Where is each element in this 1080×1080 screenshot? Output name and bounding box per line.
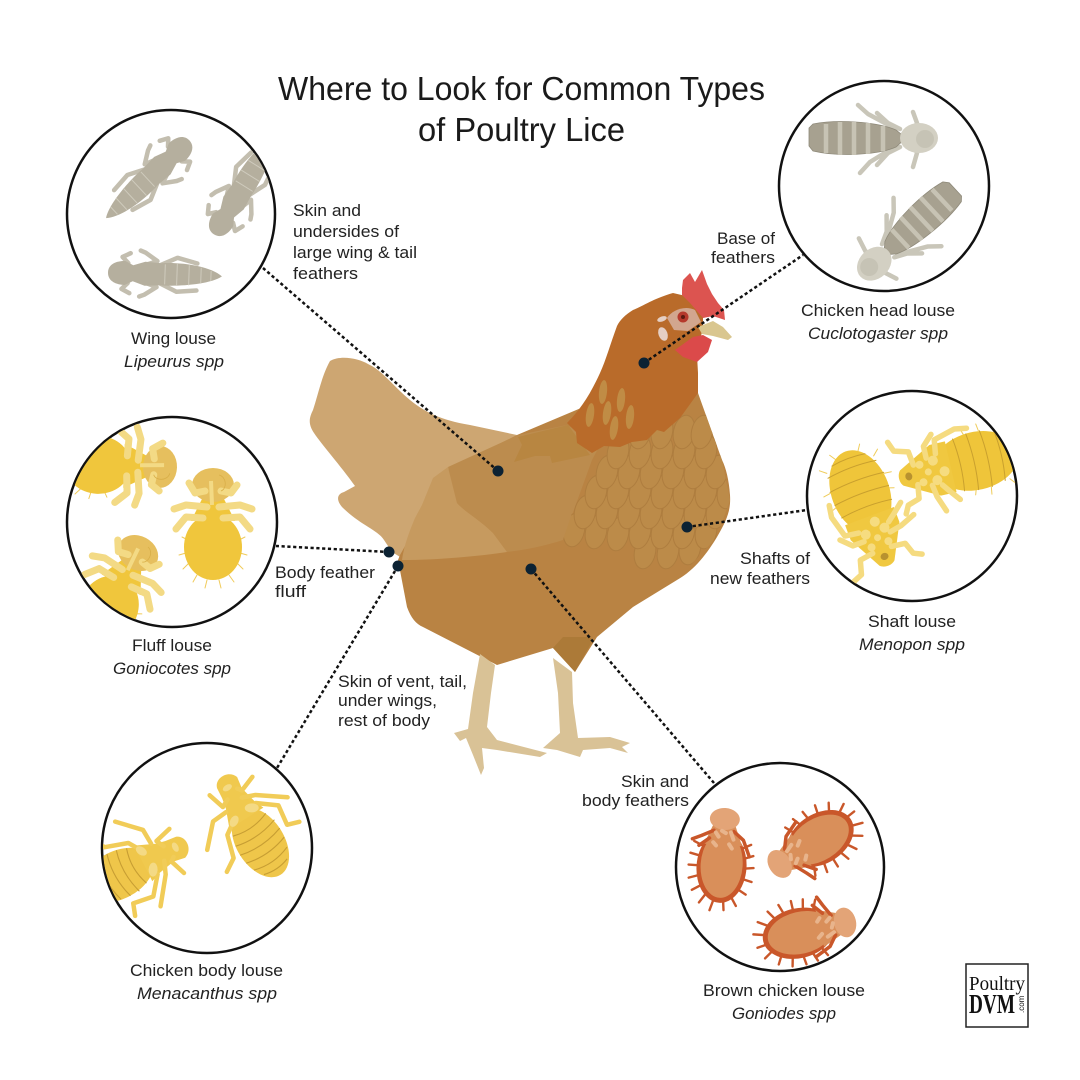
label: wing louse: Wing louse [131,330,216,348]
location text: base of feathers: Base of [717,230,775,248]
location text: skin of vent: Skin of vent, tail, [338,673,467,691]
label: chicken body louse: Menacanthus spp [137,985,277,1003]
location dots [384,358,692,574]
hen beak [698,321,732,340]
location text: skin of vent: rest of body [338,712,431,730]
label: chicken head louse: Cuclotogaster spp [808,325,948,343]
title: of Poultry Lice [418,111,625,148]
title: Where to Look for Common Types [278,70,765,107]
location text: skin and body feathers: body feathers [582,792,689,810]
panel: shaft louse [807,391,1029,601]
leader lines [263,255,807,783]
label: shaft louse: Menopon spp [859,636,965,654]
location text: base of feathers: feathers [711,249,775,267]
label: chicken body louse: Chicken body louse [130,962,283,980]
logo: PoultryDVM [966,964,1028,1027]
panel: chicken body louse [100,742,314,954]
logo: PoultryDVM: .com [1017,995,1026,1013]
logo: PoultryDVM: DVM [969,989,1015,1019]
location text: wing feathers: undersides of [293,223,399,241]
hen illustration [310,270,742,775]
label: brown chicken louse: Brown chicken louse [703,982,865,1000]
panel: wing louse [67,110,294,318]
location text: shafts of new feathers [710,550,810,588]
hen wing lower [402,467,507,560]
location text: wing feathers: feathers [293,265,358,283]
label: fluff louse: Goniocotes spp [113,660,231,678]
label: fluff louse [113,637,231,678]
location text: skin and body feathers: Skin and [621,773,689,791]
label: fluff louse: Fluff louse [132,637,212,655]
hen neck [567,293,703,453]
location text: wing feathers [293,202,417,283]
label: shaft louse: Shaft louse [868,613,956,631]
hen wing [448,425,600,552]
hen left leg [454,654,547,775]
panel: fluff louse [66,416,278,628]
label: brown chicken louse: Goniodes spp [732,1005,836,1023]
hen wattle [675,335,712,362]
location text: base of feathers [711,230,775,267]
label: chicken head louse [801,302,955,343]
logo: PoultryDVM: Poultry [969,973,1025,995]
hen wing shade [514,425,590,463]
hen face [656,308,701,342]
location text: skin of vent: under wings, [338,692,437,710]
location text: shafts of new feathers: Shafts of [740,550,810,568]
hen right leg [543,658,630,757]
panel: chicken head louse [779,81,989,301]
location text: body feather fluff: fluff [275,583,306,601]
location text: shafts of new feathers: new feathers [710,570,810,588]
location text: wing feathers: large wing & tail [293,244,417,262]
label: chicken head louse: Chicken head louse [801,302,955,320]
hen tail [310,358,517,560]
location text: body feather fluff [275,564,376,601]
panel: brown chicken louse [676,763,884,974]
hen neck feathers [584,380,635,440]
hen comb [682,270,725,320]
location text: skin of vent [338,673,467,730]
location text: wing feathers: Skin and [293,202,361,220]
label: wing louse: Lipeurus spp [124,353,224,371]
label: shaft louse [859,613,965,654]
label: brown chicken louse [703,982,865,1023]
hen leg shadow [553,637,593,672]
location text: skin and body feathers [582,773,689,810]
location text: body feather fluff: Body feather [275,564,376,582]
title [278,70,765,148]
hen chest feathers [564,415,727,569]
hen body [398,380,730,672]
label: wing louse [124,330,224,371]
label: chicken body louse [130,962,283,1003]
